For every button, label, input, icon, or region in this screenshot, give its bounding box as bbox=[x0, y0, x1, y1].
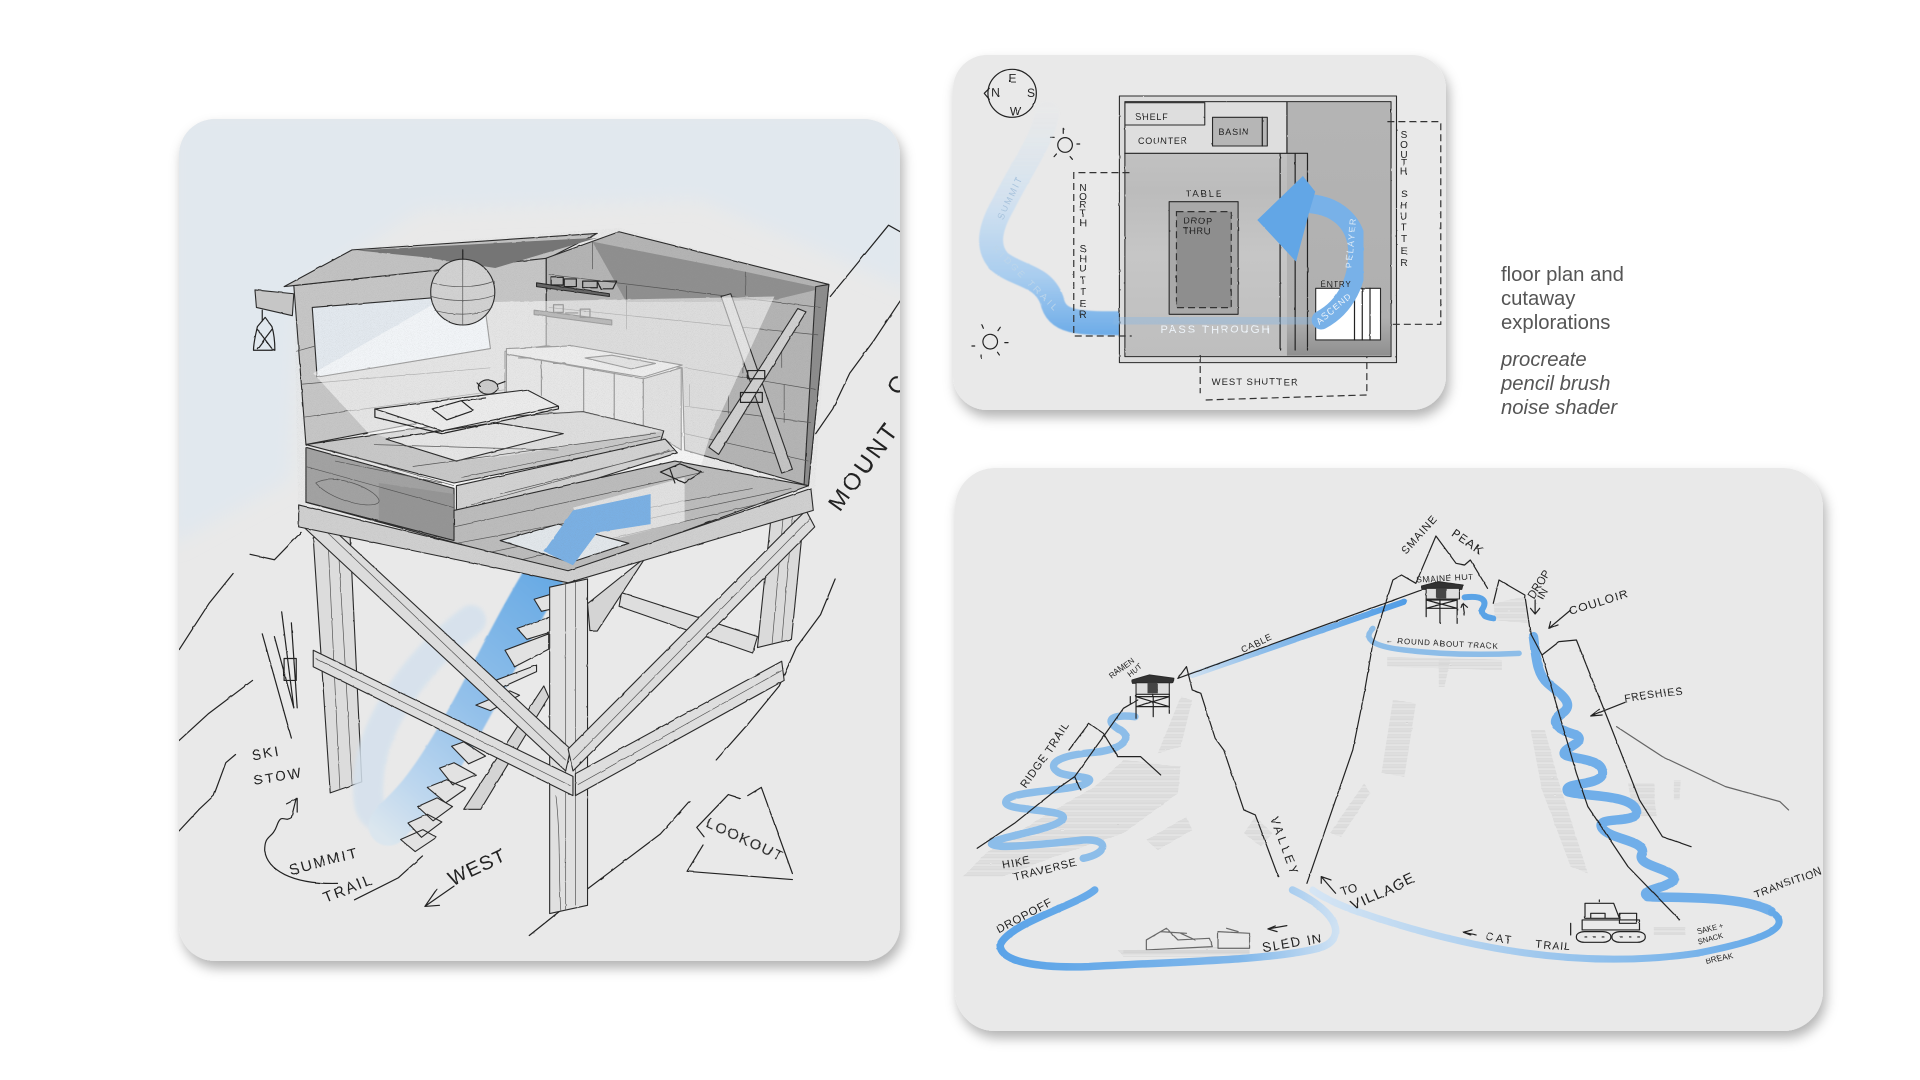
plan labels: BASIN bbox=[1218, 127, 1250, 137]
plan labels: PELAYER bbox=[1344, 217, 1358, 269]
stair treads bbox=[401, 593, 556, 852]
hand labels: SUMMIT bbox=[287, 844, 360, 879]
plan labels: THRU bbox=[1183, 226, 1211, 236]
plan labels: T bbox=[1401, 223, 1407, 234]
plan labels: WEST SHUTTER bbox=[1212, 377, 1298, 388]
plan labels: U bbox=[1079, 264, 1087, 275]
panel: floor plan bbox=[953, 55, 1446, 410]
ramen hut icon bbox=[1132, 675, 1174, 718]
arrows bbox=[1130, 600, 1625, 935]
caption: description: floor plan and bbox=[1501, 264, 1624, 286]
sky wash bbox=[183, 122, 888, 138]
caption: tools: procreate bbox=[1500, 349, 1587, 371]
map labels: SMAINE HUT bbox=[1416, 572, 1474, 584]
ascend arrow bbox=[1257, 176, 1358, 320]
sled loop bbox=[1000, 890, 1336, 967]
caption: description: cutaway bbox=[1501, 288, 1576, 310]
panel: cutaway hut sketch bbox=[170, 110, 914, 961]
map labels: SNACK bbox=[1697, 931, 1724, 946]
hut walls bbox=[284, 232, 829, 486]
plan labels: S bbox=[1080, 244, 1087, 255]
plan labels: TABLE bbox=[1186, 189, 1224, 199]
plan labels: N bbox=[1079, 183, 1087, 194]
map labels: TRANSITION bbox=[1752, 865, 1824, 901]
freshies descent bbox=[1533, 637, 1771, 912]
entry stairs bbox=[1316, 288, 1381, 340]
snowcat bbox=[1571, 900, 1645, 942]
light cone from lantern bbox=[314, 296, 774, 506]
plan labels: R bbox=[1079, 310, 1087, 321]
plan labels: ENTRY bbox=[1321, 280, 1351, 289]
hand labels: TRAIL bbox=[321, 871, 376, 907]
cross braces bbox=[304, 510, 815, 796]
rear legs and back rail bbox=[313, 494, 806, 793]
hand labels: STOW bbox=[252, 764, 304, 788]
skis crossed bbox=[709, 294, 806, 473]
map labels: CABLE bbox=[1239, 632, 1274, 655]
map labels: COULOIR bbox=[1567, 586, 1630, 618]
plan labels: S bbox=[1027, 86, 1035, 100]
kitchen counter bbox=[506, 346, 682, 450]
caption text bbox=[1500, 264, 1624, 419]
mountain label: C bbox=[882, 371, 914, 401]
map labels: BREAK bbox=[1705, 951, 1734, 966]
table bbox=[1169, 202, 1238, 314]
map labels: PEAK bbox=[1449, 526, 1486, 558]
map labels: SAKE + bbox=[1696, 921, 1725, 936]
caption: description: explorations bbox=[1501, 312, 1610, 334]
lower floor with hatch and blue arrow bbox=[299, 461, 813, 583]
plan labels: H bbox=[1400, 201, 1408, 212]
smaine hut icon bbox=[1422, 582, 1463, 623]
plan labels: H bbox=[1400, 167, 1408, 178]
blue routes bbox=[992, 597, 1779, 967]
cat trail bbox=[1313, 890, 1779, 959]
plan labels: ASCEND bbox=[1314, 291, 1354, 327]
sun icons bbox=[972, 128, 1080, 358]
plan labels: PASS THROUGH bbox=[1160, 324, 1272, 336]
plan labels: O bbox=[1400, 140, 1408, 151]
pass through trail bbox=[1125, 318, 1328, 323]
map labels: TRAVERSE bbox=[1012, 856, 1078, 884]
blue ascent trail bbox=[368, 576, 544, 826]
shutter outlines bbox=[1074, 122, 1441, 400]
sled and trailer bbox=[1123, 928, 1250, 953]
map labels: HIKE bbox=[1001, 855, 1032, 871]
ski stow bbox=[262, 612, 297, 738]
map labels: VALLEY bbox=[1267, 815, 1302, 878]
plan labels: T bbox=[1401, 158, 1407, 169]
map labels: TRAIL bbox=[1535, 938, 1572, 954]
plan labels: T bbox=[1080, 276, 1086, 287]
plan labels: SUMMIT bbox=[996, 174, 1025, 221]
front leg bbox=[550, 579, 588, 914]
plan labels: S bbox=[1401, 189, 1408, 200]
map labels: DROPOFF bbox=[994, 897, 1055, 936]
map labels: ← ROUND ABOUT TRACK bbox=[1385, 636, 1499, 651]
map labels: IN bbox=[1535, 587, 1551, 602]
plan labels: E bbox=[1008, 71, 1016, 85]
plan labels: R bbox=[1400, 258, 1408, 269]
hanging lantern and beam bbox=[254, 290, 294, 350]
caption: tools: noise shader bbox=[1501, 397, 1618, 419]
plan labels: H bbox=[1079, 254, 1087, 265]
summit ridge trail bbox=[991, 113, 1125, 323]
plan labels: U bbox=[1400, 150, 1408, 161]
plan labels: T bbox=[1080, 209, 1086, 220]
mountain outlines bbox=[977, 536, 1789, 920]
raised platform bbox=[306, 412, 677, 541]
mountain ridge lines bbox=[179, 225, 903, 935]
map labels: FRESHIES bbox=[1624, 685, 1684, 705]
map labels: HUT bbox=[1125, 661, 1144, 679]
plan labels: W bbox=[1009, 104, 1021, 118]
pencil grain over the hut bbox=[294, 228, 829, 583]
plan labels: S bbox=[1401, 130, 1408, 141]
hand labels bbox=[251, 743, 786, 907]
wall shelves with cups bbox=[534, 277, 617, 325]
plan labels: H bbox=[1079, 218, 1087, 229]
plan labels: O bbox=[1079, 192, 1087, 203]
paper lantern bbox=[431, 250, 495, 325]
hand labels: LOOKOUT bbox=[703, 814, 786, 865]
map labels: RIDGE TRAIL bbox=[1018, 720, 1073, 791]
cable route bbox=[1192, 602, 1404, 675]
trail squiggle arrow bbox=[265, 798, 337, 883]
map labels: SLED IN bbox=[1261, 930, 1324, 955]
building shell bbox=[1119, 96, 1396, 363]
plan labels bbox=[991, 71, 1408, 388]
compass bbox=[984, 69, 1036, 117]
lookout triangle bbox=[687, 787, 792, 880]
hike switchbacks bbox=[992, 716, 1135, 858]
plan labels: U bbox=[1400, 212, 1408, 223]
summit squiggle bbox=[1465, 597, 1493, 618]
plan labels: R bbox=[1079, 200, 1087, 211]
map labels: CAT bbox=[1485, 931, 1514, 947]
plan labels: COUNTER bbox=[1138, 136, 1188, 146]
map labels: SMAINE bbox=[1399, 513, 1440, 557]
plan labels: RIDGE TRAIL bbox=[991, 244, 1061, 314]
round about track bbox=[1369, 628, 1519, 654]
plan labels: T bbox=[1401, 234, 1407, 245]
plan drawing bbox=[972, 69, 1441, 400]
map labels: VILLAGE bbox=[1348, 870, 1418, 914]
map labels: TO bbox=[1339, 880, 1359, 899]
plan labels: SHELF bbox=[1135, 112, 1169, 122]
plan labels: T bbox=[1080, 287, 1086, 298]
west arrow bbox=[425, 886, 454, 906]
map labels: DROP bbox=[1526, 568, 1553, 601]
map labels bbox=[994, 513, 1824, 966]
hand labels: SKI bbox=[251, 743, 282, 763]
mountain label: MOUNT bbox=[823, 417, 905, 516]
caption: tools: pencil brush bbox=[1500, 373, 1610, 395]
plan labels: E bbox=[1080, 299, 1087, 310]
map labels: RAMEN bbox=[1107, 655, 1136, 680]
plan labels: E bbox=[1401, 246, 1408, 257]
hatched snow shading bbox=[963, 597, 1685, 957]
plan labels: N bbox=[992, 86, 1000, 100]
panel: mountain route map bbox=[955, 468, 1824, 1031]
mountain label bbox=[828, 376, 900, 512]
table with teapot and papers bbox=[375, 380, 558, 434]
hand labels: WEST bbox=[445, 845, 510, 891]
plan labels: DROP bbox=[1184, 216, 1212, 226]
